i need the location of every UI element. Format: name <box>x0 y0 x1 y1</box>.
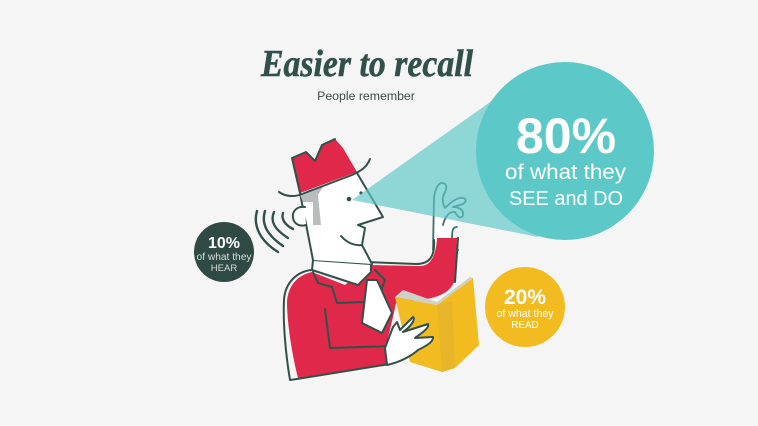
person: arm and torso <box>287 238 457 378</box>
subtitle: People remember <box>317 89 415 103</box>
book <box>395 277 479 372</box>
person: raised hand outline <box>433 183 466 250</box>
callout: 80 percent see and do: SEE and DO <box>509 188 623 210</box>
person: sleeve and jacket lines <box>297 270 392 379</box>
icon: sound waves <box>256 211 293 252</box>
person: hand on book <box>385 317 433 365</box>
person: shirt collar <box>312 260 371 285</box>
vision beam <box>352 95 560 237</box>
person <box>279 139 479 380</box>
callout: 20 percent read: of what they <box>496 308 554 320</box>
person: hair <box>300 187 323 225</box>
callout: 20 percent read: READ <box>511 320 539 331</box>
person: eye <box>347 197 351 201</box>
callout: 10 percent hear: of what they <box>197 252 252 263</box>
callout: 20 percent read: 20% <box>504 286 546 309</box>
callout: 20 percent read <box>485 267 565 347</box>
person: nostril <box>359 191 363 195</box>
callout: 10 percent hear: 10% <box>208 235 240 252</box>
person: hat <box>292 139 357 193</box>
person: tie <box>362 280 392 333</box>
person: raised hand <box>433 183 466 250</box>
callout: 10 percent hear <box>194 222 254 282</box>
person: face <box>300 173 383 264</box>
person: ear <box>293 207 306 226</box>
person: hat outline <box>279 139 370 196</box>
callout: 80 percent see and do: 80% <box>516 108 616 164</box>
callout: 80 percent see and do: of what they <box>505 161 627 184</box>
person: body outline <box>284 238 458 380</box>
callout: 10 percent hear: HEAR <box>211 263 237 274</box>
title: Easier to recall <box>260 43 473 85</box>
callout: 80 percent see and do <box>476 62 654 240</box>
person: face outline <box>300 173 383 264</box>
